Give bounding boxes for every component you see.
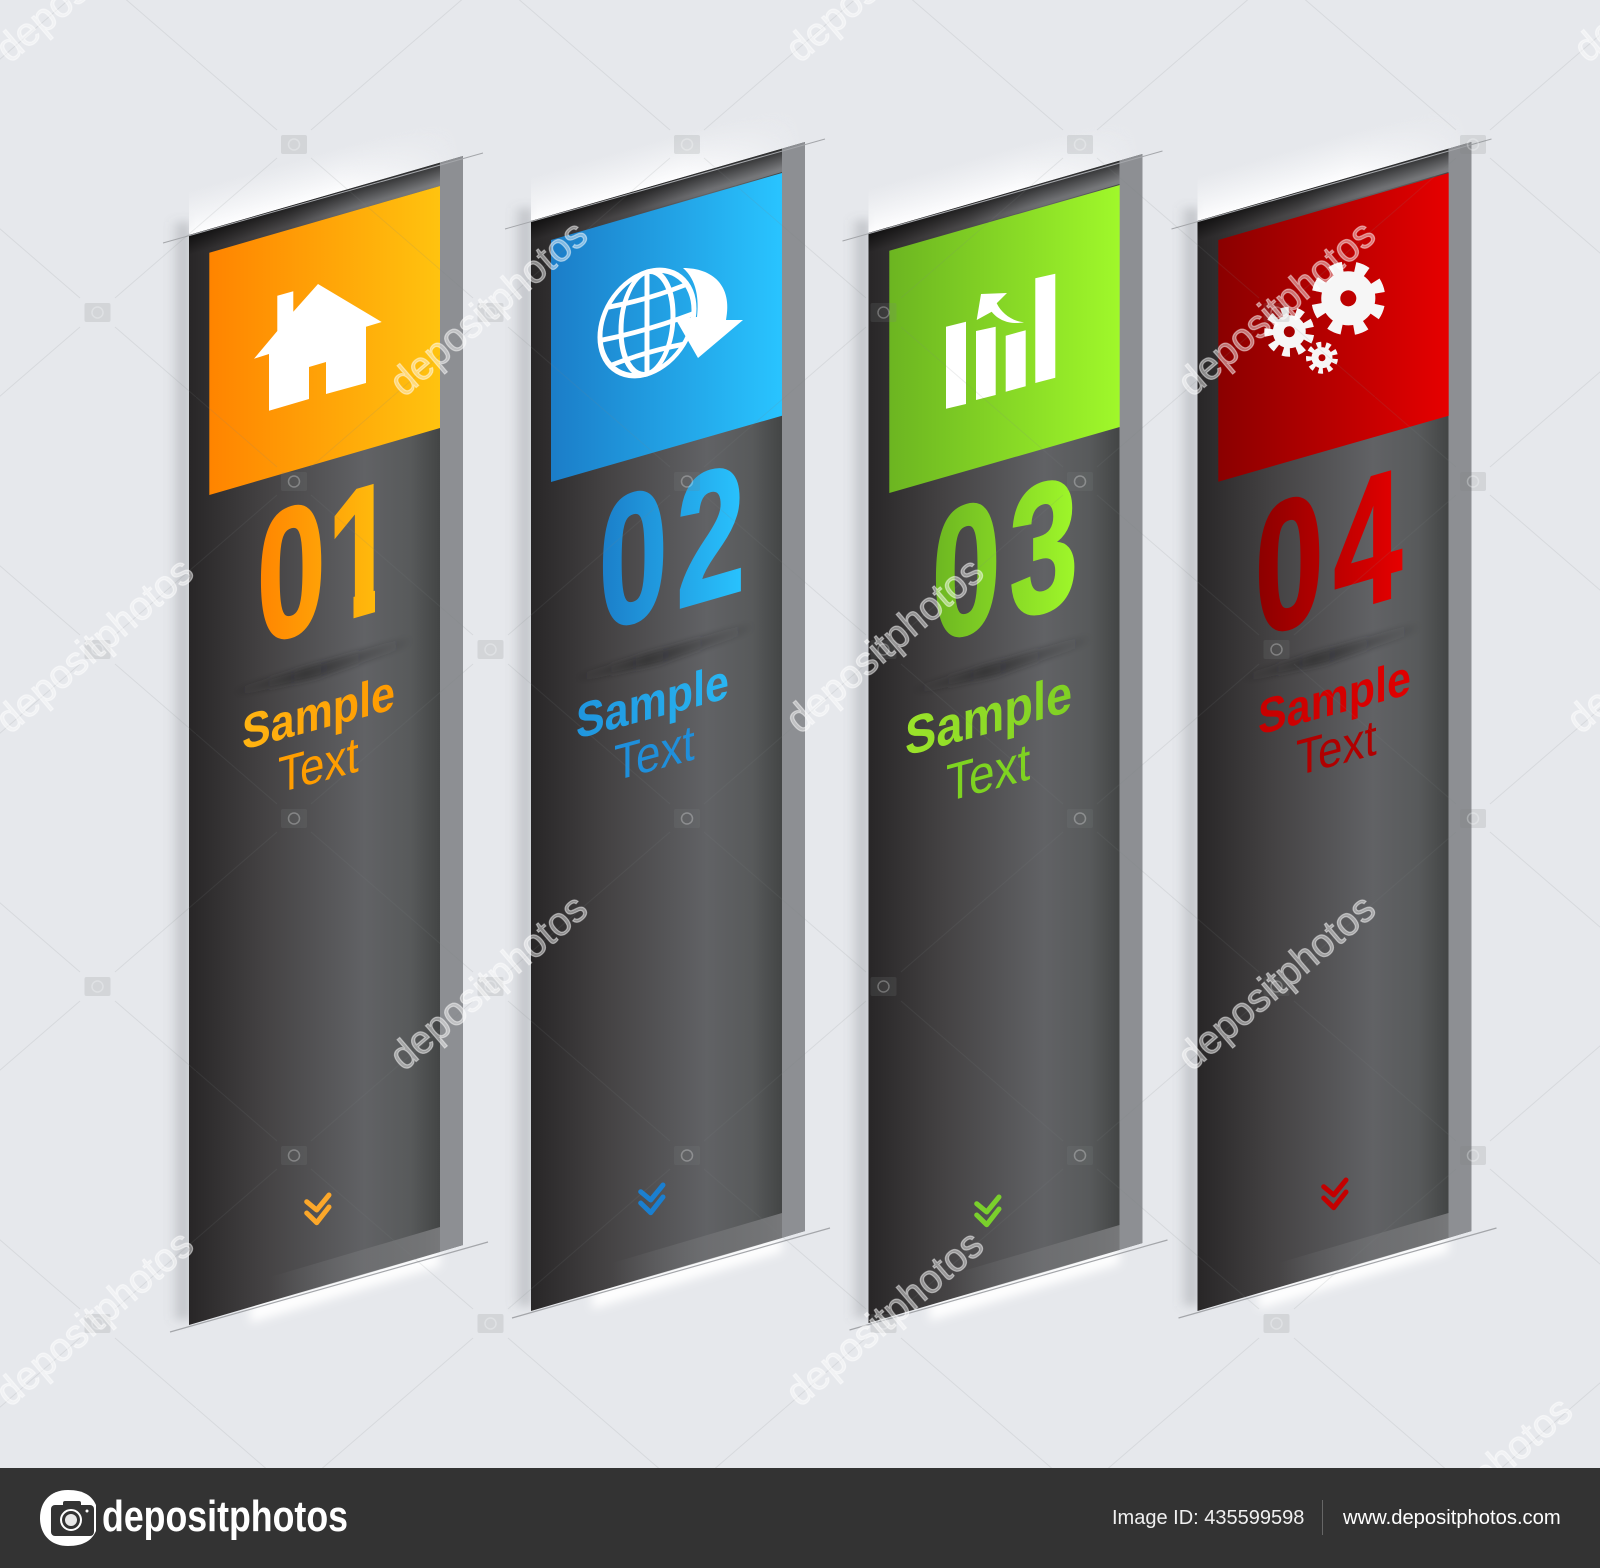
number 04: 0 [1255,453,1323,676]
logo icon: camera [40,1490,96,1546]
watermark text: depositphotos [1169,886,1384,1079]
number 04: 4 [1334,430,1402,654]
Sample label: Sample [576,653,729,750]
panel 1 frame [163,110,488,1332]
logo wordmark: depositphotos [102,1492,348,1541]
Text label: Text [614,714,695,793]
number 02: 0 [599,447,667,670]
icon: chevrons [977,1197,999,1225]
site url: www.depositphotos.com [1342,1507,1561,1529]
footer bar [0,1468,1600,1568]
panel 3: green chart [842,108,1168,1330]
panel 2 colour block [551,173,782,482]
separator [1322,1500,1324,1535]
panel 3 colour block [889,185,1120,493]
watermark text: depositphotos [1169,212,1384,405]
panel 4 frame [1172,96,1496,1318]
icon: gears [1266,262,1384,372]
Text label: Text [946,731,1030,814]
digit 1 foot cover [328,570,402,628]
icon: house [254,284,382,411]
watermark text: depositphotos [381,212,596,405]
image id: Image ID: 435599598 [1112,1507,1304,1529]
number 02: 2 [676,424,745,648]
panel 4: red gears [1172,96,1496,1318]
icon: chevrons [307,1195,329,1223]
panel 1 colour block [209,186,440,495]
Text label: Text [278,726,359,805]
icon: chevrons [1324,1180,1346,1208]
number 01: 0 [257,461,325,684]
Text label: Text [1296,709,1377,788]
watermark text: depositphotos [777,549,992,742]
watermark text: depositphotos [381,886,596,1079]
number 03: 3 [1009,436,1078,660]
panel 2 frame [505,96,830,1318]
icon: chevrons [641,1185,663,1213]
number 01: 1 [327,440,396,664]
icon: globe with arrow [600,258,743,388]
Sample label: Sample [1258,649,1411,746]
panel 2: blue globe [505,96,830,1318]
Sample label: Sample [905,661,1072,768]
panel 3 frame [842,108,1168,1330]
panel 4 colour block [1218,173,1449,482]
Sample label: Sample [242,664,395,761]
icon: bar chart with arrow [946,274,1055,409]
panel 1: orange home [163,110,488,1332]
number 03: 0 [932,459,1000,682]
watermark text: depositphotos [777,1222,992,1415]
